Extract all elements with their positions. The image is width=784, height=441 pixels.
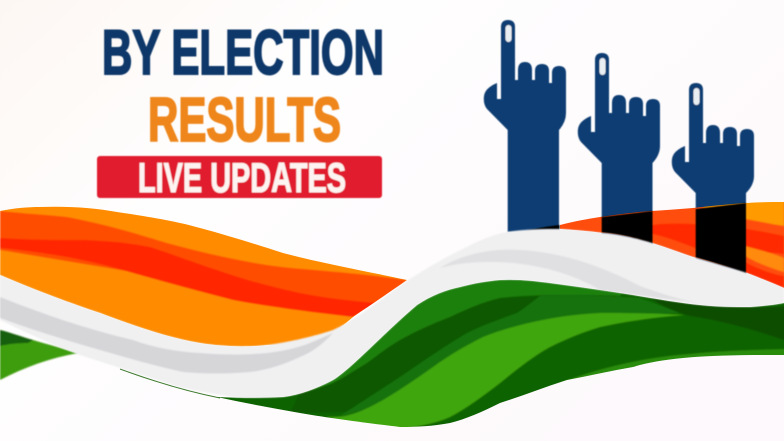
mid dark band above bright (340, 296, 680, 416)
icon: hand one (484, 20, 566, 232)
heading: by election: BY ELECTION (102, 18, 384, 88)
ribbon: thin green edge under white wave (120, 369, 220, 398)
bottom edge green strip (560, 348, 784, 382)
medium green upper band (313, 280, 622, 390)
icon: arm shadows over ribbon (525, 203, 746, 274)
red orange stripe (0, 211, 407, 310)
icon: hand two (578, 53, 660, 265)
ribbon: saffron wave left (0, 200, 420, 350)
title block (97, 18, 384, 201)
ribbon: green wave (218, 280, 784, 427)
grey shade left (0, 297, 333, 374)
bright green stripe (325, 313, 685, 428)
darkest right band (650, 298, 784, 342)
red stripe (0, 238, 377, 317)
icon: hand three (672, 83, 754, 290)
ribbon: saffron band behind hands (560, 202, 784, 288)
badge: live updates: LIVE UPDATES (138, 154, 346, 201)
ribbon: white wave (0, 229, 784, 398)
dark band (290, 296, 540, 413)
heading: results: RESULTS (148, 86, 341, 155)
grey shade right (440, 250, 700, 303)
icon: three raised voting hands (484, 20, 754, 290)
ribbon: small green wave left (0, 330, 78, 380)
base dark green (218, 293, 784, 427)
